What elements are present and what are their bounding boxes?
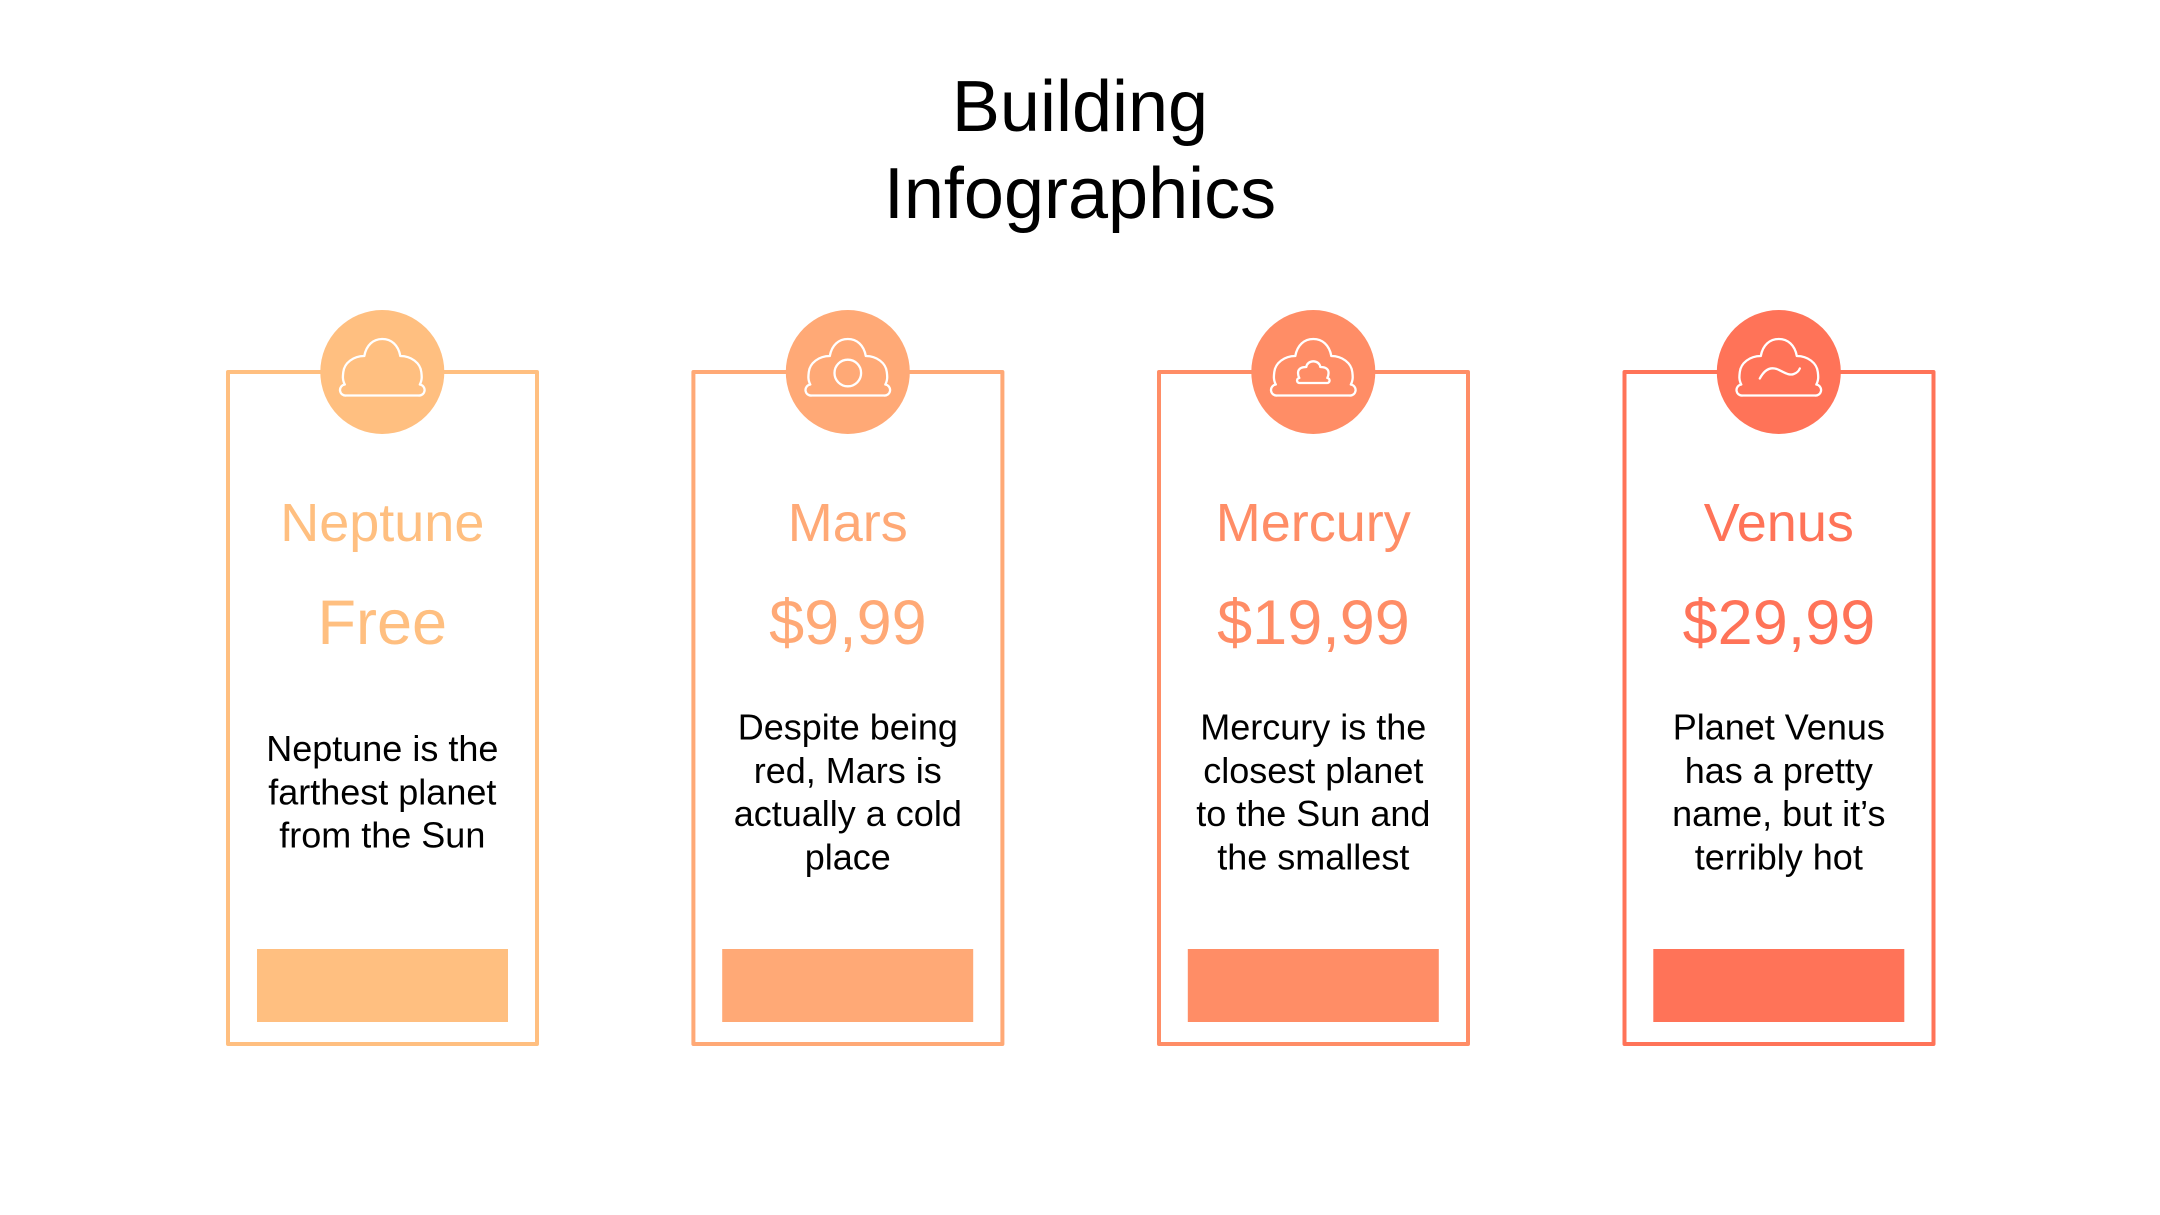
description: Mars: actually a cold [734,793,962,834]
description: Venus: name, but it’s [1672,793,1886,834]
description: Neptune [266,728,498,856]
button: Mercury [1188,949,1439,1022]
description: Venus: has a pretty [1685,750,1873,791]
icon: cloud [320,310,444,434]
price: Free: Free [318,588,447,658]
description: Mercury: to the Sun and [1196,793,1430,834]
description: Venus: Planet Venus [1673,706,1885,748]
icon: cloud with small cloud [1251,310,1375,434]
button: Venus [1653,949,1904,1022]
button: Neptune [257,949,508,1022]
description: Neptune: farthest planet [268,771,496,812]
description: Venus: terribly hot [1695,836,1863,877]
description: Mars: place [805,836,891,877]
title [884,67,1276,234]
description: Mars: Despite being [738,706,958,748]
icon: cloud with circle [786,310,910,434]
card outline: Neptune [228,372,537,1044]
title: Building [952,67,1208,147]
price: $29,99: $29,99 [1683,588,1875,658]
icon: cloud with wave [1717,310,1841,434]
panel: Venus [1624,310,1934,1044]
card outline: Mars [693,372,1002,1044]
panel: Mars [693,310,1002,1044]
description: Mercury [1196,706,1430,877]
description: Mars: red, Mars is [754,750,942,791]
plan name: Mars: Mars [788,493,908,553]
button: Mars [722,949,973,1022]
description: Neptune: from the Sun [279,815,485,856]
plan name: Venus: Venus [1704,493,1854,553]
description: Mars [734,706,962,877]
plan name: Mercury: Mercury [1216,493,1411,553]
description: Neptune: Neptune is the [266,728,498,769]
description: Mercury: closest planet [1203,750,1423,791]
card outline: Mercury [1159,372,1468,1044]
description: Mercury: Mercury is the [1200,706,1426,748]
price: $9,99: $9,99 [769,588,927,658]
panel: Neptune [228,310,537,1044]
panel: Mercury [1159,310,1468,1044]
plan name: Neptune: Neptune [280,493,484,553]
description: Venus [1672,706,1886,877]
title: Infographics [884,154,1276,234]
card outline: Venus [1624,372,1934,1044]
price: $19,99: $19,99 [1217,588,1410,658]
description: Mercury: the smallest [1217,836,1409,877]
